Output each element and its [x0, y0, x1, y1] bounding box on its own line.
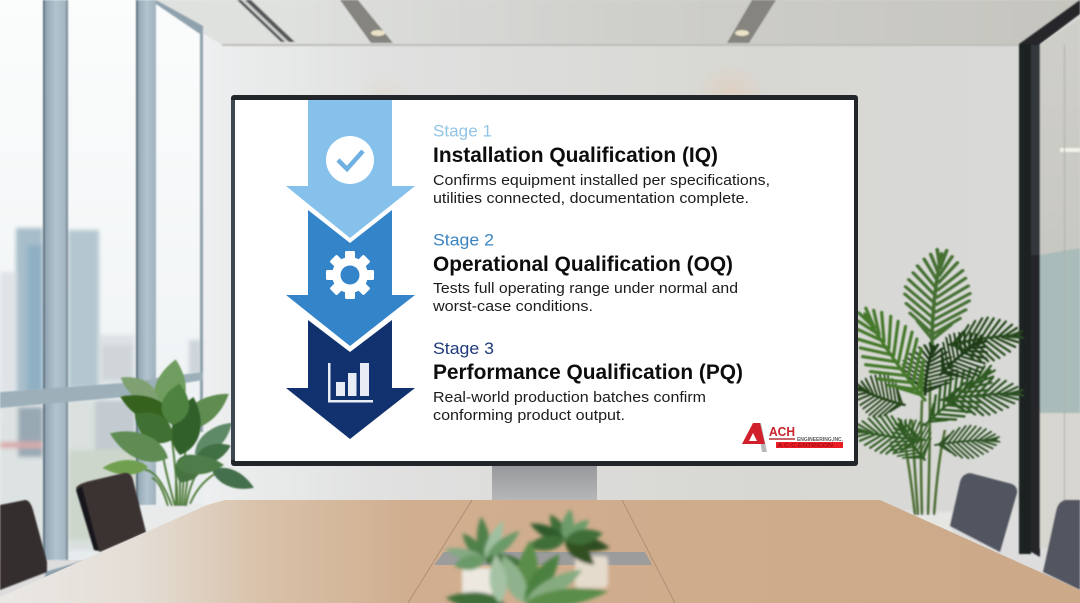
text block: stage 1: Installation Qualification (IQ): [433, 144, 718, 167]
conference table: [0, 500, 1080, 603]
wall display: [231, 95, 858, 466]
text block: stage 3: Stage 3: [433, 339, 494, 358]
right palm plant: [839, 246, 1025, 532]
icon: bar chart: [328, 363, 373, 402]
display stand: [492, 466, 597, 501]
icon: check mark badge: [326, 136, 374, 184]
text block: stage 3: Real-world production batches confirm: [433, 389, 706, 406]
text block: stage 2: Operational Qualification (OQ): [433, 253, 733, 276]
ceiling with light tracks and vent: [150, 0, 1080, 116]
company logo: ACH: [769, 424, 795, 439]
company logo: ENGINEERING,INC.: [797, 437, 844, 443]
text block: stage 3: Performance Qualification (PQ): [433, 361, 743, 384]
chairs: [0, 473, 1080, 590]
text block: stage 1: utilities connected, documentation complete.: [433, 190, 749, 207]
right glass partition: [1019, 0, 1080, 557]
text block: stage 1: [433, 122, 770, 207]
table cable tray: [434, 552, 652, 565]
arrow 1: installation qualification: [286, 100, 415, 238]
text block: stage 3: conforming product output.: [433, 407, 625, 424]
left potted plant: [102, 357, 257, 530]
icon: gear: [326, 251, 374, 299]
text block: stage 3: [433, 339, 743, 424]
table centre plants: [443, 508, 611, 603]
text block: stage 2: worst-case conditions.: [432, 298, 593, 315]
text block: stage 1: Confirms equipment installed per specifications,: [433, 172, 770, 189]
left window wall with city view: [0, 0, 203, 585]
company logo: [742, 423, 844, 452]
window mullions: [0, 0, 203, 585]
city buildings: [0, 228, 201, 550]
text block: stage 2: Stage 2: [433, 230, 494, 250]
arrow 2: operational qualification: [286, 210, 415, 346]
text block: stage 2: [432, 230, 738, 315]
pot: [905, 513, 952, 532]
company logo: A C-C ENTRICON: [778, 443, 834, 449]
slide screen: [235, 100, 854, 461]
text block: stage 1: Stage 1: [433, 122, 492, 140]
arrow 3: performance qualification: [286, 320, 415, 439]
pot: [143, 503, 205, 530]
text block: stage 2: Tests full operating range under normal and: [433, 280, 738, 297]
monitor bezel: [231, 95, 858, 466]
